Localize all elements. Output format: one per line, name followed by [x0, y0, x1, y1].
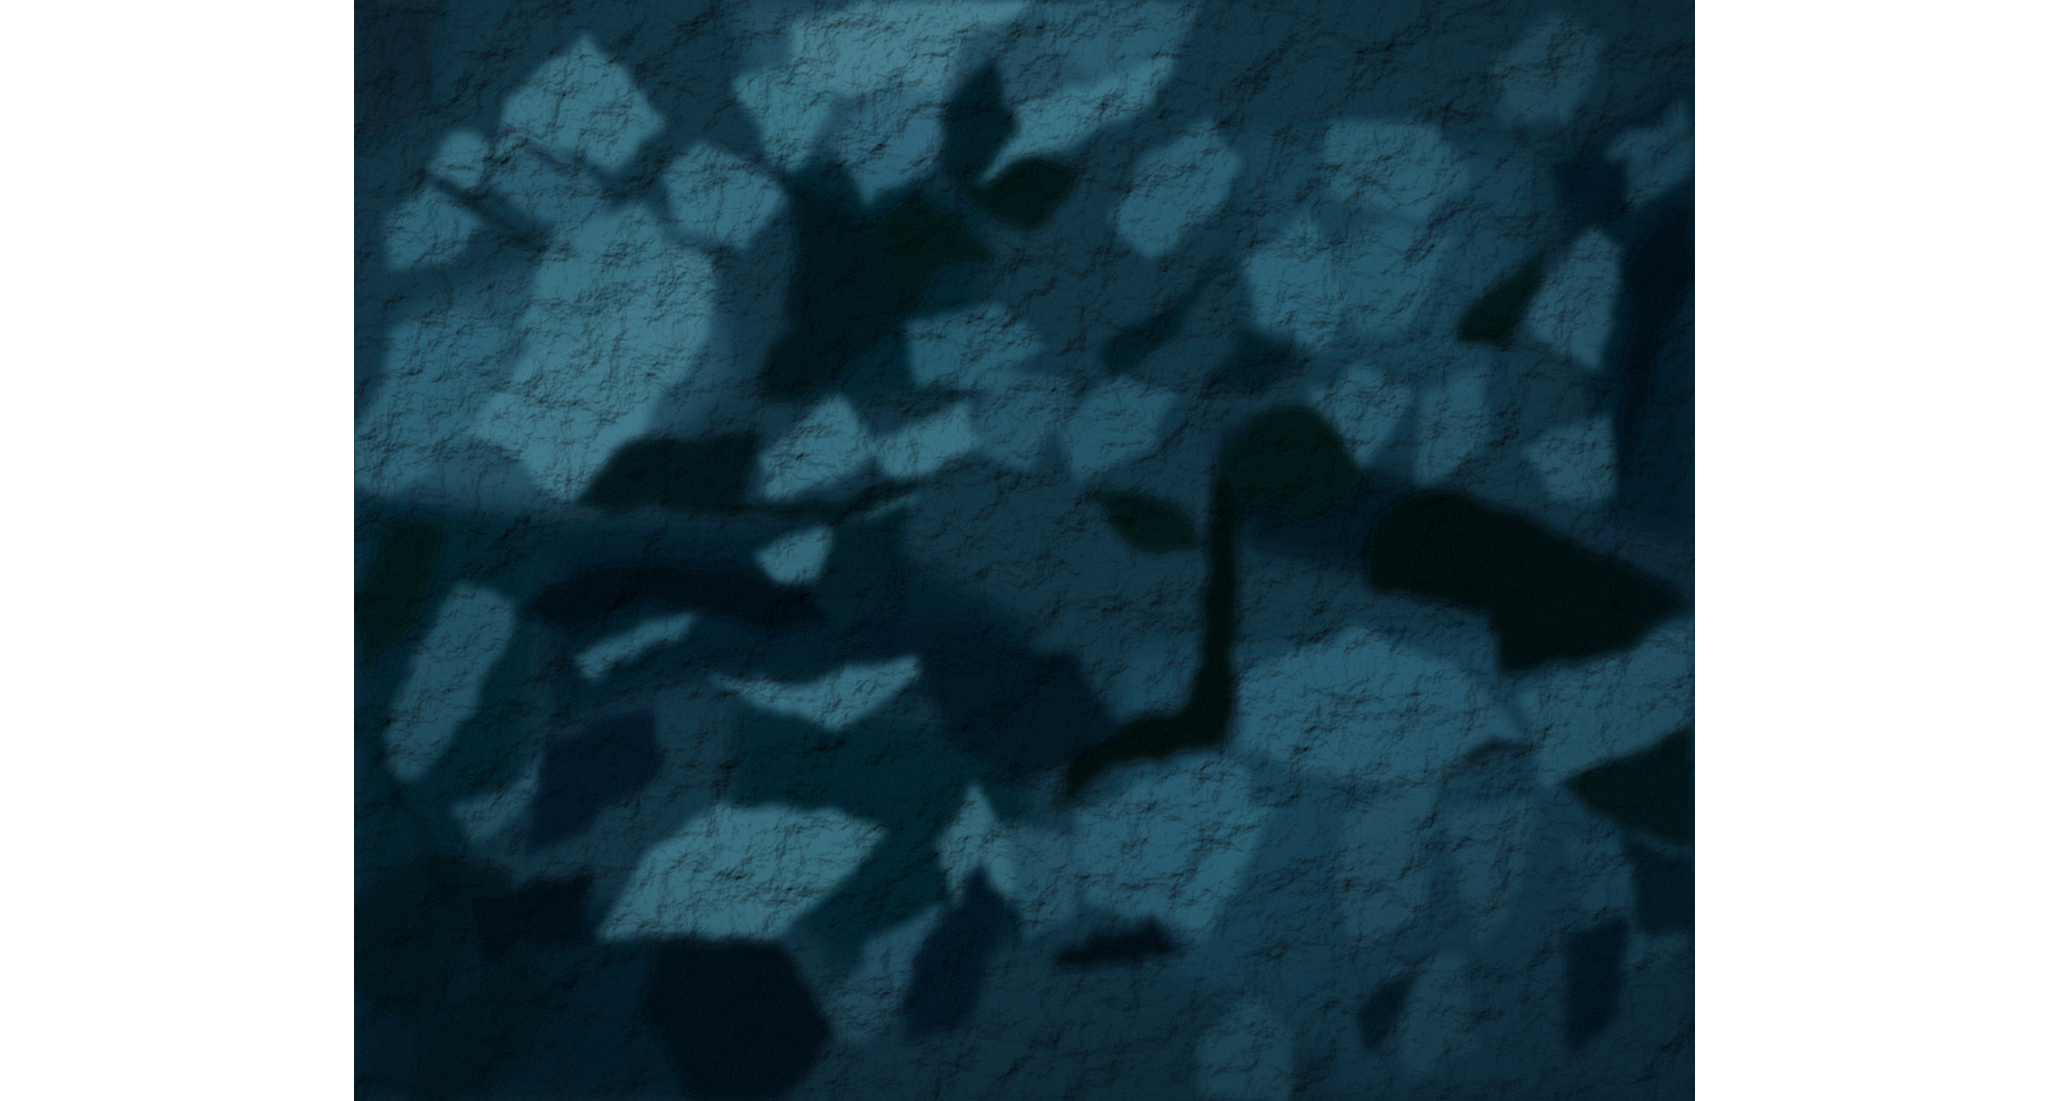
crease lines — [355, 26, 1685, 1019]
crumple relief — [354, 0, 1695, 1101]
deep shadows — [353, 52, 1695, 1101]
paper grain — [354, 0, 1695, 1101]
crumpled paper photo — [353, 0, 1695, 1101]
broad tonal regions — [354, 0, 1695, 1101]
edge shading — [354, 0, 1695, 1101]
light facets — [353, 0, 1695, 1101]
